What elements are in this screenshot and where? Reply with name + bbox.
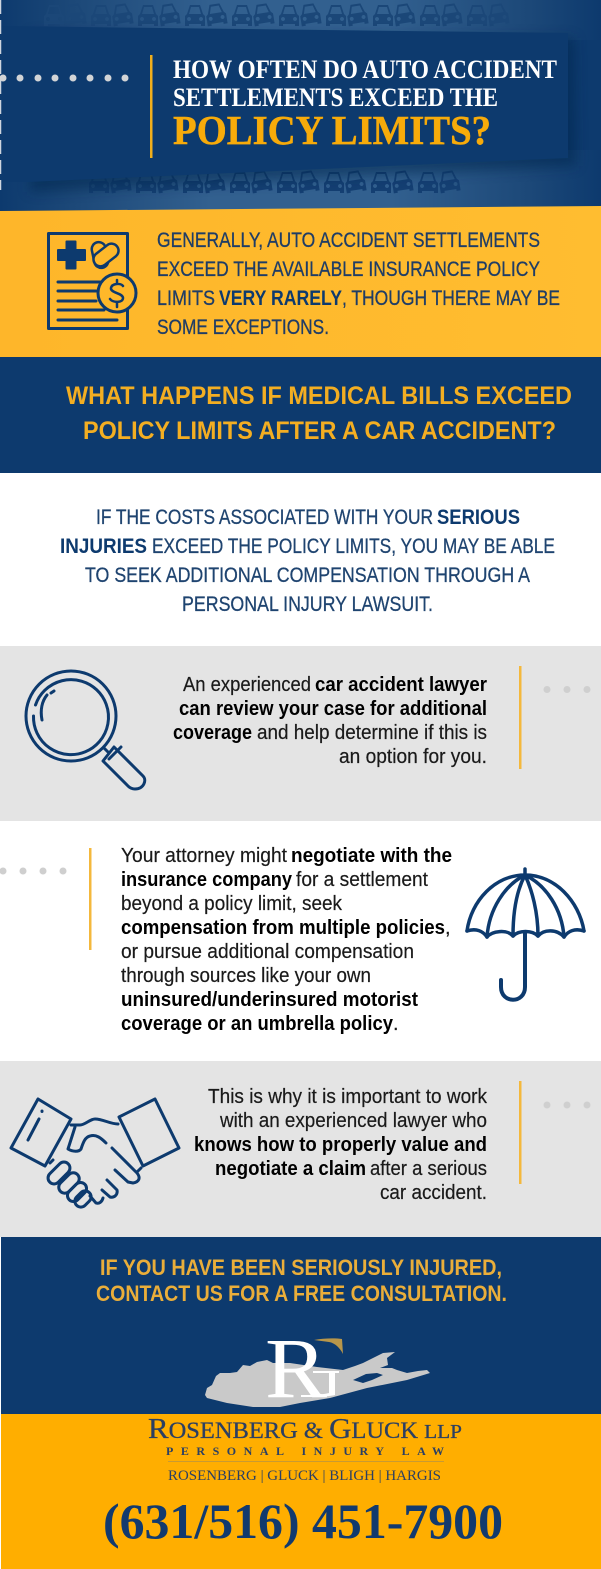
options text: negotiate with the xyxy=(291,845,452,867)
summary text: SOME EXCEPTIONS. xyxy=(157,316,329,339)
work with lawyer text: negotiate a claim xyxy=(215,1158,366,1180)
review text xyxy=(173,674,487,768)
options text: uninsured/underinsured motorist xyxy=(121,989,418,1011)
text block: answer: PERSONAL INJURY LAWSUIT. xyxy=(182,593,433,616)
text block: answer: SERIOUS xyxy=(437,506,520,529)
car pattern bottom xyxy=(89,170,461,193)
work with lawyer text: knows how to properly value and xyxy=(194,1134,487,1156)
summary text: LIMITS xyxy=(157,287,215,310)
title: HOW OFTEN DO AUTO ACCIDENT xyxy=(173,55,557,84)
question heading: WHAT HAPPENS IF MEDICAL BILLS EXCEED xyxy=(66,382,572,410)
panel: question band xyxy=(0,357,601,473)
panel: lawyer review xyxy=(0,646,601,821)
options text: coverage or an umbrella policy xyxy=(121,1013,394,1035)
divider and dots xyxy=(519,666,590,769)
review text: car accident lawyer xyxy=(315,674,487,696)
work with lawyer text: with an experienced lawyer who xyxy=(219,1110,487,1132)
options text xyxy=(121,845,452,1035)
options text: , xyxy=(445,917,451,939)
summary text: , THOUGH THERE MAY BE xyxy=(342,287,560,310)
title: POLICY LIMITS? xyxy=(173,107,491,153)
options text: compensation from multiple policies xyxy=(121,917,445,939)
work with lawyer text: after a serious xyxy=(370,1158,487,1180)
options text: for a settlement xyxy=(296,869,428,891)
header dots xyxy=(0,74,128,82)
options text: through sources like your own xyxy=(121,965,371,987)
icon: magnifying glass xyxy=(26,671,145,789)
options text: . xyxy=(393,1013,399,1035)
logo mark: Long Island with RG xyxy=(205,1320,430,1416)
options text: or pursue additional compensation xyxy=(121,941,414,963)
panel: attorney options xyxy=(0,821,601,1061)
call to action text xyxy=(96,1255,507,1306)
text block: answer: TO SEEK ADDITIONAL COMPENSATION THROUGH A xyxy=(85,564,530,587)
work with lawyer text: car accident. xyxy=(380,1182,487,1204)
question heading xyxy=(66,382,572,445)
title: SETTLEMENTS EXCEED THE xyxy=(173,83,498,112)
firm name: ROSENBERG & GLUCK LLP xyxy=(148,1413,462,1445)
panel: footer call to action xyxy=(1,1237,601,1416)
panel: work with lawyer xyxy=(0,1061,601,1237)
review text: and help determine if this is xyxy=(257,722,487,744)
text block: answer xyxy=(0,473,601,646)
panel: firm logo and phone xyxy=(1,1413,601,1569)
call to action text: IF YOU HAVE BEEN SERIOUSLY INJURED, xyxy=(100,1255,502,1280)
question heading: POLICY LIMITS AFTER A CAR ACCIDENT? xyxy=(83,417,556,445)
summary text xyxy=(157,229,560,339)
text block: answer: IF THE COSTS ASSOCIATED WITH YOUR xyxy=(96,506,433,529)
icon: umbrella xyxy=(467,869,584,1000)
review text: an option for you. xyxy=(339,746,487,768)
icon: medical bill xyxy=(48,234,136,328)
summary text: VERY RARELY xyxy=(219,287,342,310)
divider and dots xyxy=(519,1081,590,1184)
header banner xyxy=(0,0,601,212)
title xyxy=(173,55,557,153)
divider and dots xyxy=(0,848,92,950)
panel: yellow summary xyxy=(0,206,601,357)
work with lawyer text xyxy=(194,1086,488,1204)
review text: An experienced xyxy=(183,674,311,696)
text block: answer: INJURIES xyxy=(60,535,147,558)
review text: can review your case for additional xyxy=(179,698,487,720)
logo mark: Long Island with RG: R xyxy=(265,1320,328,1416)
firm tagline: PERSONAL INJURY LAW xyxy=(166,1444,444,1458)
options text: beyond a policy limit, seek xyxy=(121,893,343,915)
options text: insurance company xyxy=(121,869,293,891)
call to action text: CONTACT US FOR A FREE CONSULTATION. xyxy=(96,1281,507,1306)
options text: Your attorney might xyxy=(121,845,287,867)
review text: coverage xyxy=(173,722,252,744)
partner names: ROSENBERG | GLUCK | BLIGH | HARGIS xyxy=(168,1468,441,1484)
header divider xyxy=(150,55,152,158)
phone number: (631/516) 451-7900 xyxy=(103,1493,503,1549)
car pattern top xyxy=(44,3,510,26)
icon: handshake xyxy=(11,1099,179,1210)
work with lawyer text: This is why it is important to work xyxy=(208,1086,488,1108)
